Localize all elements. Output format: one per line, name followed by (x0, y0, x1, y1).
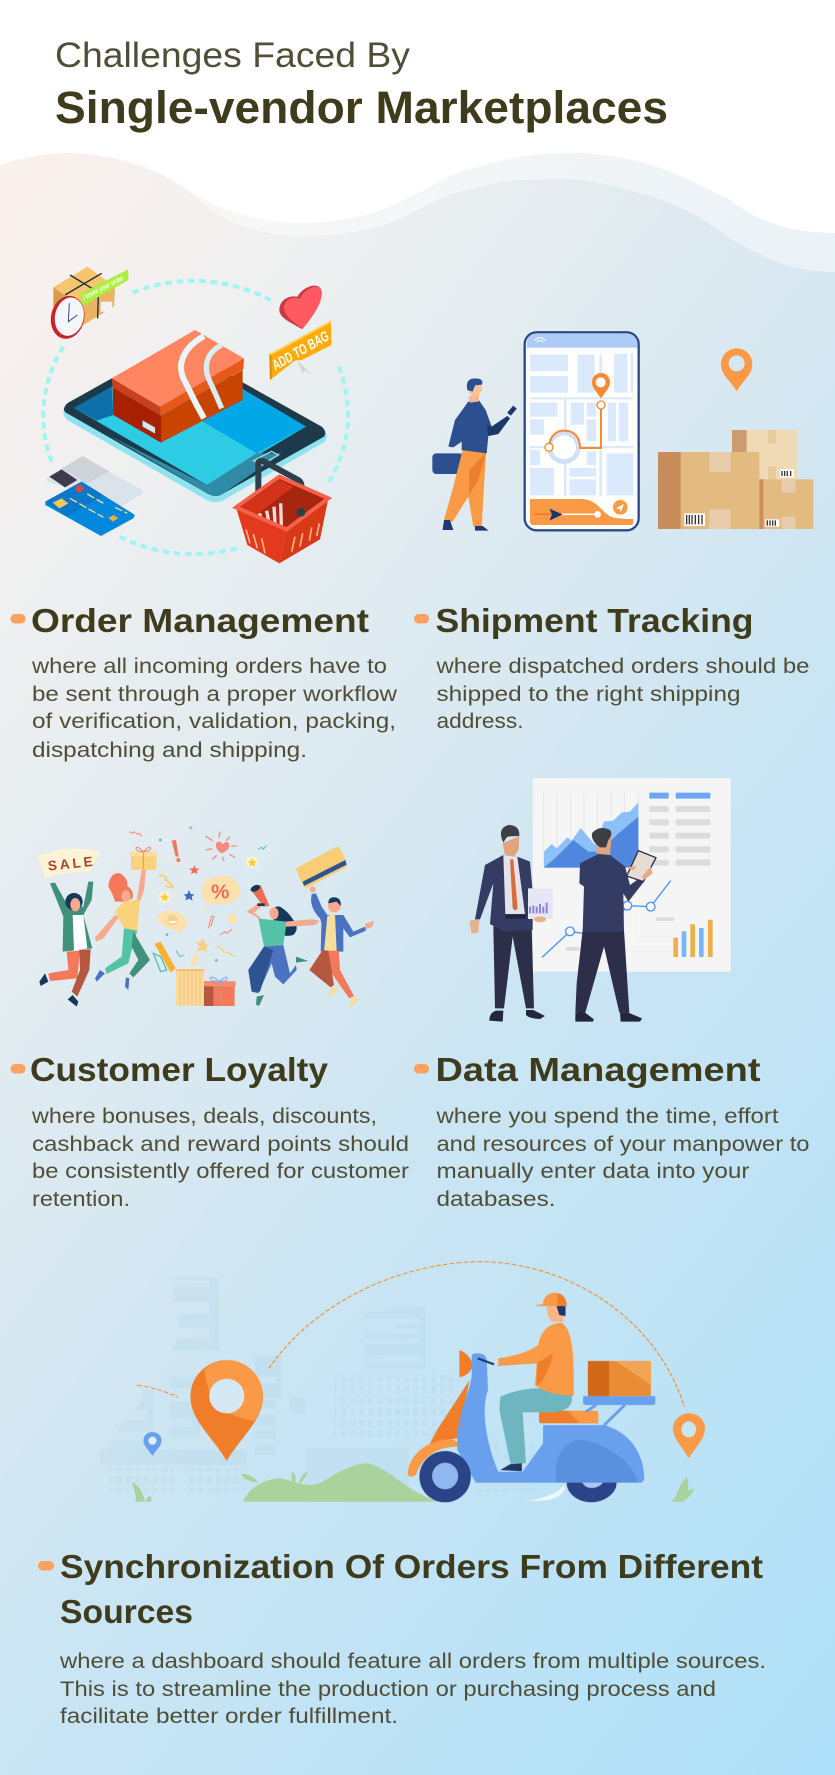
scooter and rider (408, 1293, 655, 1502)
section: shipment tracking: where dispatched orders should be (435, 654, 810, 678)
illustration: shipment tracking (432, 332, 813, 531)
large map pin (190, 1360, 263, 1461)
heart (279, 286, 322, 329)
illustration: data management analysts (469, 778, 731, 1022)
section: data management: manually enter data into your (436, 1159, 750, 1183)
shopping basket (236, 461, 328, 563)
section: order management: be sent through a proper workflow (32, 682, 398, 706)
section: data management: Data Management (436, 1051, 761, 1088)
section: data management (414, 1051, 810, 1211)
section: order management: dispatching and shipping. (32, 738, 307, 762)
tablet (63, 344, 327, 502)
title: Single-vendor Marketplaces (55, 82, 668, 133)
man facing viewer (469, 825, 553, 1022)
section: customer loyalty (10, 1051, 409, 1211)
person with sale banner: SALE (47, 854, 93, 874)
wave: white header area (0, 0, 835, 233)
credit cards (45, 456, 143, 536)
confetti and speech bubbles: % (211, 880, 229, 903)
section: order management: Order Management (31, 602, 369, 639)
section: customer loyalty: where bonuses, deals, discounts, (31, 1104, 377, 1128)
right orange pin (673, 1413, 705, 1458)
person with credit card (296, 847, 374, 1007)
section: customer loyalty: cashback and reward points should (32, 1132, 409, 1156)
add to bag tag: ADD TO BAG (269, 329, 332, 374)
faded city skyline (100, 1277, 535, 1502)
add to bag tag (269, 321, 332, 380)
section: synchronization of orders: This is to streamline the production or purchasing process and (60, 1677, 716, 1701)
section: customer loyalty: be consistently offered for customer (32, 1159, 409, 1183)
section: synchronization of orders: Sources (60, 1593, 193, 1630)
dashed route (137, 1262, 684, 1407)
confetti and speech bubbles (129, 826, 267, 962)
man viewed from behind (575, 828, 656, 1022)
illustration: order management tablet (43, 267, 348, 563)
section: order management: of verification, validation, packing, (32, 709, 396, 733)
cardboard boxes (658, 430, 813, 529)
section: synchronization of orders: where a dashboard should feature all orders from multiple sources. (59, 1649, 766, 1673)
section: synchronization of orders: facilitate better order fulfillment. (60, 1704, 398, 1728)
title (55, 36, 668, 133)
dashed ring (43, 281, 348, 554)
man with briefcase (432, 378, 517, 531)
section: synchronization of orders: Synchronization Of Orders From Different (60, 1548, 763, 1585)
dashboard board (533, 778, 731, 972)
section: shipment tracking: shipped to the right shipping (436, 682, 740, 706)
person with megaphone (247, 884, 319, 1006)
location pin (721, 348, 752, 391)
illustration: customer loyalty celebration (38, 826, 374, 1007)
section: data management: where you spend the time, effort (435, 1104, 779, 1128)
phone map (525, 332, 639, 530)
title: Challenges Faced By (55, 36, 411, 75)
section: customer loyalty: Customer Loyalty (30, 1051, 329, 1088)
parcel with clock: I come your order (81, 273, 126, 302)
small blue pin (143, 1432, 161, 1456)
section: shipment tracking: address. (436, 709, 524, 733)
illustration: delivery scooter (100, 1262, 705, 1502)
wave: light band (69, 153, 835, 272)
section: order management (10, 602, 398, 762)
person with gift (95, 847, 157, 990)
section: shipment tracking: Shipment Tracking (436, 602, 754, 639)
green hill and plants (132, 1463, 694, 1502)
parcel with clock (47, 267, 128, 342)
section: shipment tracking (414, 602, 810, 733)
person with sale banner (38, 848, 100, 1007)
open gift boxes (153, 938, 236, 1006)
section: synchronization of orders (38, 1548, 766, 1728)
section: data management: and resources of your manpower to (436, 1132, 810, 1156)
section: customer loyalty: retention. (32, 1187, 130, 1211)
section: order management: where all incoming orders have to (31, 654, 387, 678)
section: data management: databases. (436, 1187, 556, 1211)
shoe box (112, 330, 244, 443)
